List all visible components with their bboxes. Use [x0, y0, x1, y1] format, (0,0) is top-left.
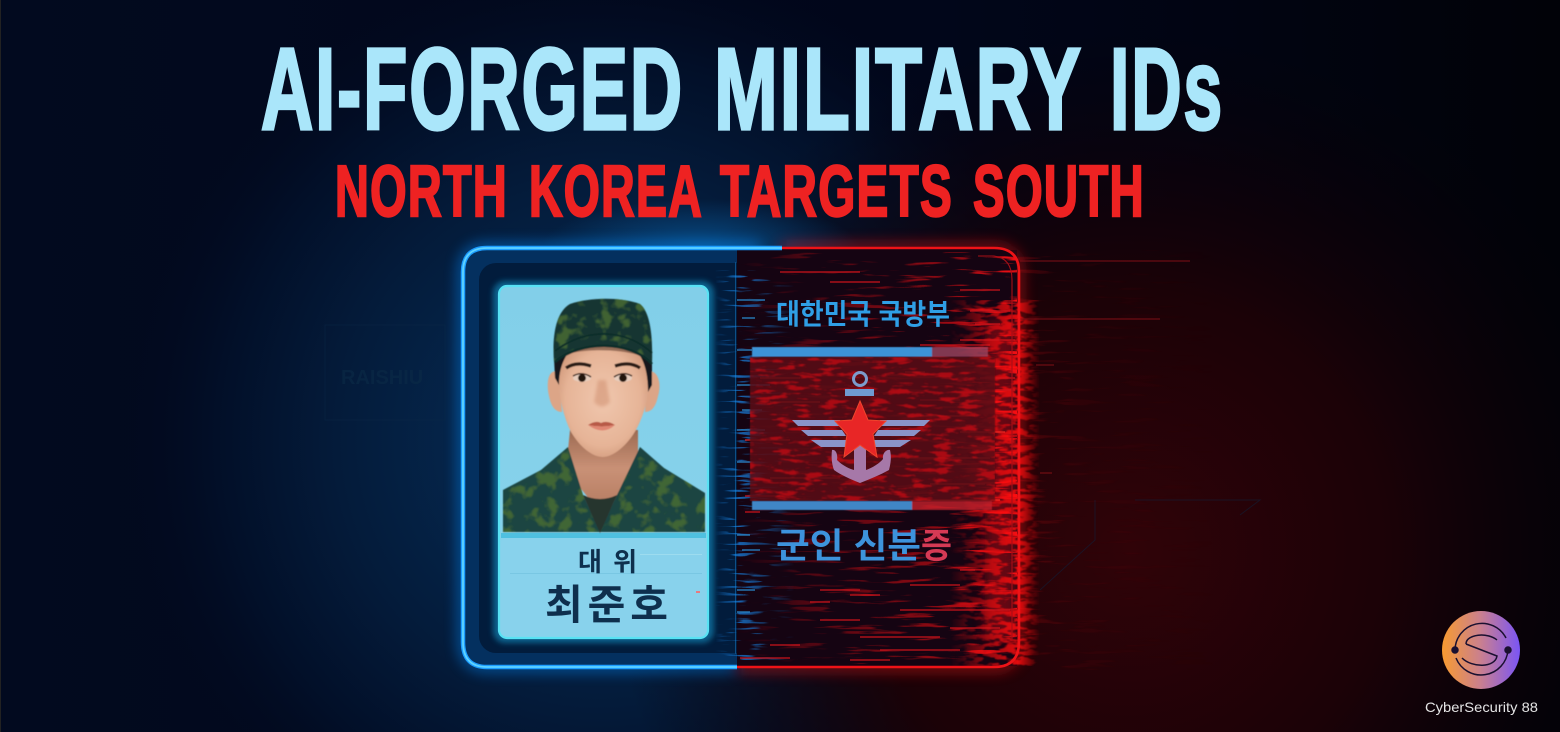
- neck: [566, 430, 644, 500]
- photo panel: [493, 281, 714, 643]
- logo mark: [1452, 623, 1511, 675]
- card glow: [463, 248, 1018, 667]
- cap: [552, 298, 654, 368]
- uniform: [500, 445, 708, 533]
- subtitle: SOUTH: [973, 151, 1145, 232]
- red star: [835, 401, 886, 457]
- ears: [548, 371, 660, 412]
- subtitle: [335, 151, 1145, 232]
- ID card: [463, 248, 1218, 670]
- glitch streaks: [715, 250, 1218, 670]
- nose: [594, 380, 610, 406]
- lower band: [752, 501, 992, 510]
- undershirt: [583, 495, 617, 533]
- logo text: CyberSecurity 88: [1425, 699, 1538, 715]
- emblem: [792, 372, 930, 483]
- title: IDs: [1110, 24, 1224, 154]
- name label: 최준호: [545, 582, 668, 628]
- subtitle: KOREA: [529, 151, 703, 232]
- anchor: [832, 440, 891, 483]
- title: MILITARY: [714, 24, 1083, 154]
- face: [557, 341, 650, 457]
- card border: [463, 248, 1019, 667]
- right panel contents: [750, 299, 995, 566]
- red glitch block: [750, 357, 995, 501]
- anchor ring: [854, 372, 866, 386]
- logo: [1425, 611, 1538, 715]
- rank label: 대 위: [578, 547, 637, 577]
- id heading: 군인 신분: [776, 527, 921, 566]
- soldier portrait: [500, 298, 708, 533]
- subtitle: TARGETS: [720, 151, 953, 232]
- wings: [792, 420, 930, 447]
- brows: [566, 364, 640, 368]
- subtitle: NORTH: [335, 151, 508, 232]
- ministry heading: 대한민국 국방부: [776, 299, 950, 331]
- crossbar: [845, 389, 874, 396]
- eyes: [573, 374, 632, 382]
- id heading: 증: [921, 527, 952, 566]
- title: AI-FORGED: [261, 24, 684, 154]
- upper band: [752, 347, 988, 357]
- card right body: [735, 249, 1017, 666]
- mouth: [588, 422, 615, 430]
- hair: [554, 348, 652, 392]
- card left body: [465, 250, 737, 665]
- background: RAISHIU: [341, 367, 423, 389]
